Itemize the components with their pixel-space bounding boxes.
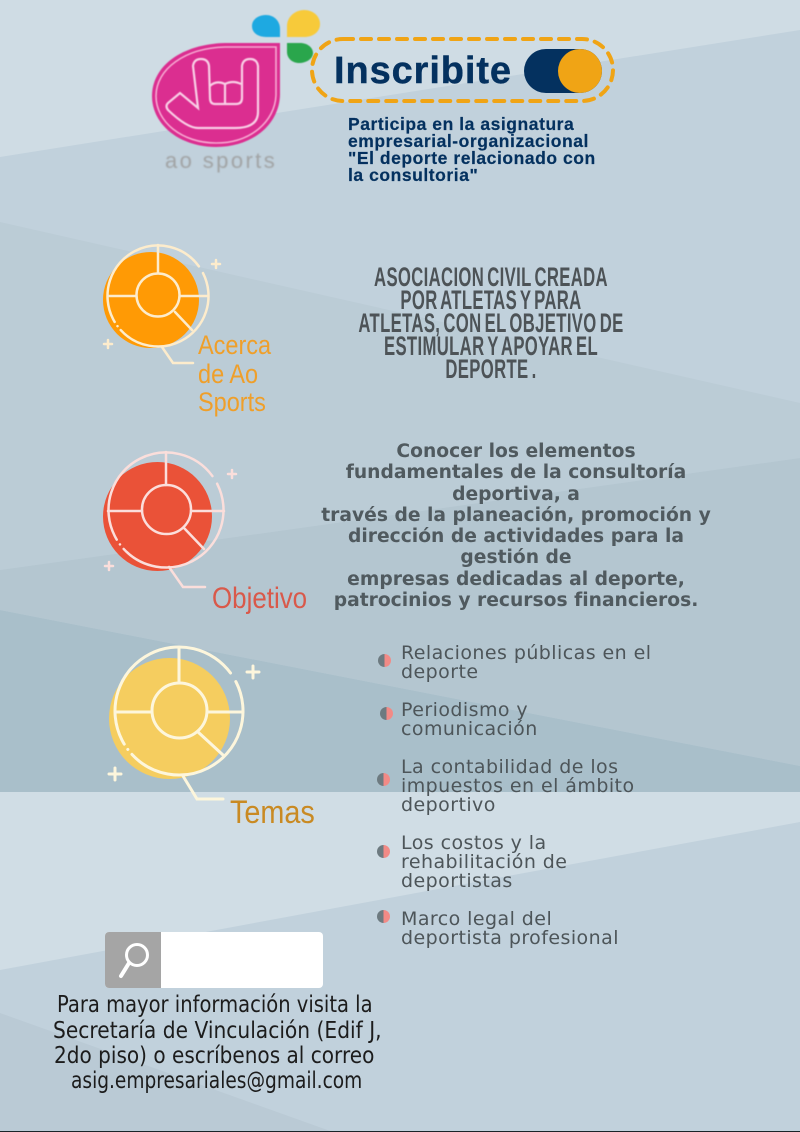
item 3: impuestos en el ámbito bbox=[401, 775, 635, 797]
item 5 bbox=[401, 908, 619, 949]
icon: magnifier bbox=[105, 932, 161, 988]
icon: blue petal bbox=[252, 15, 280, 37]
item 5: deportista profesional bbox=[401, 927, 619, 949]
text: objective: fundamentales de la consultoría bbox=[346, 462, 686, 483]
item 1 bbox=[401, 642, 651, 683]
button text: Inscribite bbox=[334, 50, 512, 92]
label: Temas: Temas bbox=[230, 794, 315, 830]
item 3: deportivo bbox=[401, 794, 496, 816]
bullet 3 bbox=[377, 773, 390, 786]
logo: ao sports bbox=[151, 9, 321, 173]
item 4: Los costos y la bbox=[401, 832, 547, 854]
item 1: deporte bbox=[401, 661, 478, 683]
text: about: ASOCIACION CIVIL CREADA bbox=[374, 262, 608, 292]
subtitle: "El deporte relacionado con bbox=[348, 148, 596, 168]
text: objective: dirección de actividades para la bbox=[348, 526, 684, 547]
item 2 bbox=[401, 699, 538, 740]
item 4 bbox=[401, 832, 567, 892]
list: temas bbox=[377, 642, 651, 949]
toggle switch bbox=[524, 49, 602, 93]
text: contact information: Secretaría de Vinculación (Edif J, bbox=[53, 1018, 382, 1044]
text: about: ESTIMULAR Y APOYAR EL bbox=[384, 331, 598, 361]
icon: red circle bbox=[103, 450, 238, 588]
icon: green petal bbox=[287, 43, 313, 63]
text: objective: Conocer los elementos bbox=[396, 441, 636, 462]
item 3 bbox=[401, 756, 635, 816]
text: objective: gestión de bbox=[460, 547, 572, 568]
subtitle: Participa en la asignatura bbox=[348, 114, 574, 134]
subtitle bbox=[348, 114, 596, 185]
text: contact information: 2do piso) o escríbenos al correo bbox=[54, 1043, 374, 1069]
badge: Inscribite bbox=[310, 37, 615, 103]
text: contact information: Para mayor información visita la bbox=[57, 992, 373, 1018]
text: contact information: asig.empresariales@gmail.com bbox=[71, 1068, 362, 1094]
text: about: POR ATLETAS Y PARA bbox=[400, 285, 582, 315]
item 3: La contabilidad de los bbox=[401, 756, 618, 778]
text: contact information bbox=[53, 992, 382, 1094]
text: about: DEPORTE . bbox=[445, 354, 537, 384]
icon: yellow petal bbox=[287, 10, 320, 37]
text: objective: empresas dedicadas al deporte, bbox=[347, 569, 685, 590]
bullet 1 bbox=[378, 654, 391, 667]
search bar bbox=[105, 932, 323, 988]
bullet 5 bbox=[377, 910, 390, 923]
subtitle: empresarial-organizacional bbox=[348, 131, 589, 151]
item 4: deportistas bbox=[401, 870, 513, 892]
label: Acerca de Ao Sports bbox=[198, 330, 272, 417]
item 1: Relaciones públicas en el bbox=[401, 642, 651, 664]
text: about bbox=[358, 262, 624, 384]
text: objective bbox=[321, 441, 711, 611]
label: Objetivo: Objetivo bbox=[212, 582, 307, 615]
item 5: Marco legal del bbox=[401, 908, 552, 930]
label: Acerca de Ao Sports: Acerca bbox=[198, 330, 271, 360]
item 2: comunicación bbox=[401, 718, 538, 740]
text: objective: deportiva, a bbox=[452, 484, 580, 505]
dashed outline bbox=[312, 39, 613, 101]
text: objective: patrocinios y recursos financieros. bbox=[334, 590, 698, 611]
item 4: rehabilitación de bbox=[401, 851, 567, 873]
bullet 4 bbox=[377, 845, 390, 858]
label: Acerca de Ao Sports: Sports bbox=[198, 387, 266, 417]
icon: yellow circle bbox=[108, 646, 260, 800]
text: objective: través de la planeación, promoción y bbox=[321, 505, 711, 526]
logo wordmark: ao sports bbox=[165, 148, 277, 173]
item 2: Periodismo y bbox=[401, 699, 528, 721]
bullet 2 bbox=[380, 707, 393, 720]
text: about: ATLETAS, CON EL OBJETIVO DE bbox=[358, 308, 624, 338]
icon: orange circle bbox=[102, 244, 222, 364]
subtitle: la consultoria" bbox=[348, 165, 478, 185]
label: Acerca de Ao Sports: de Ao bbox=[198, 358, 258, 388]
icon: pink drop with hand bbox=[152, 43, 280, 147]
